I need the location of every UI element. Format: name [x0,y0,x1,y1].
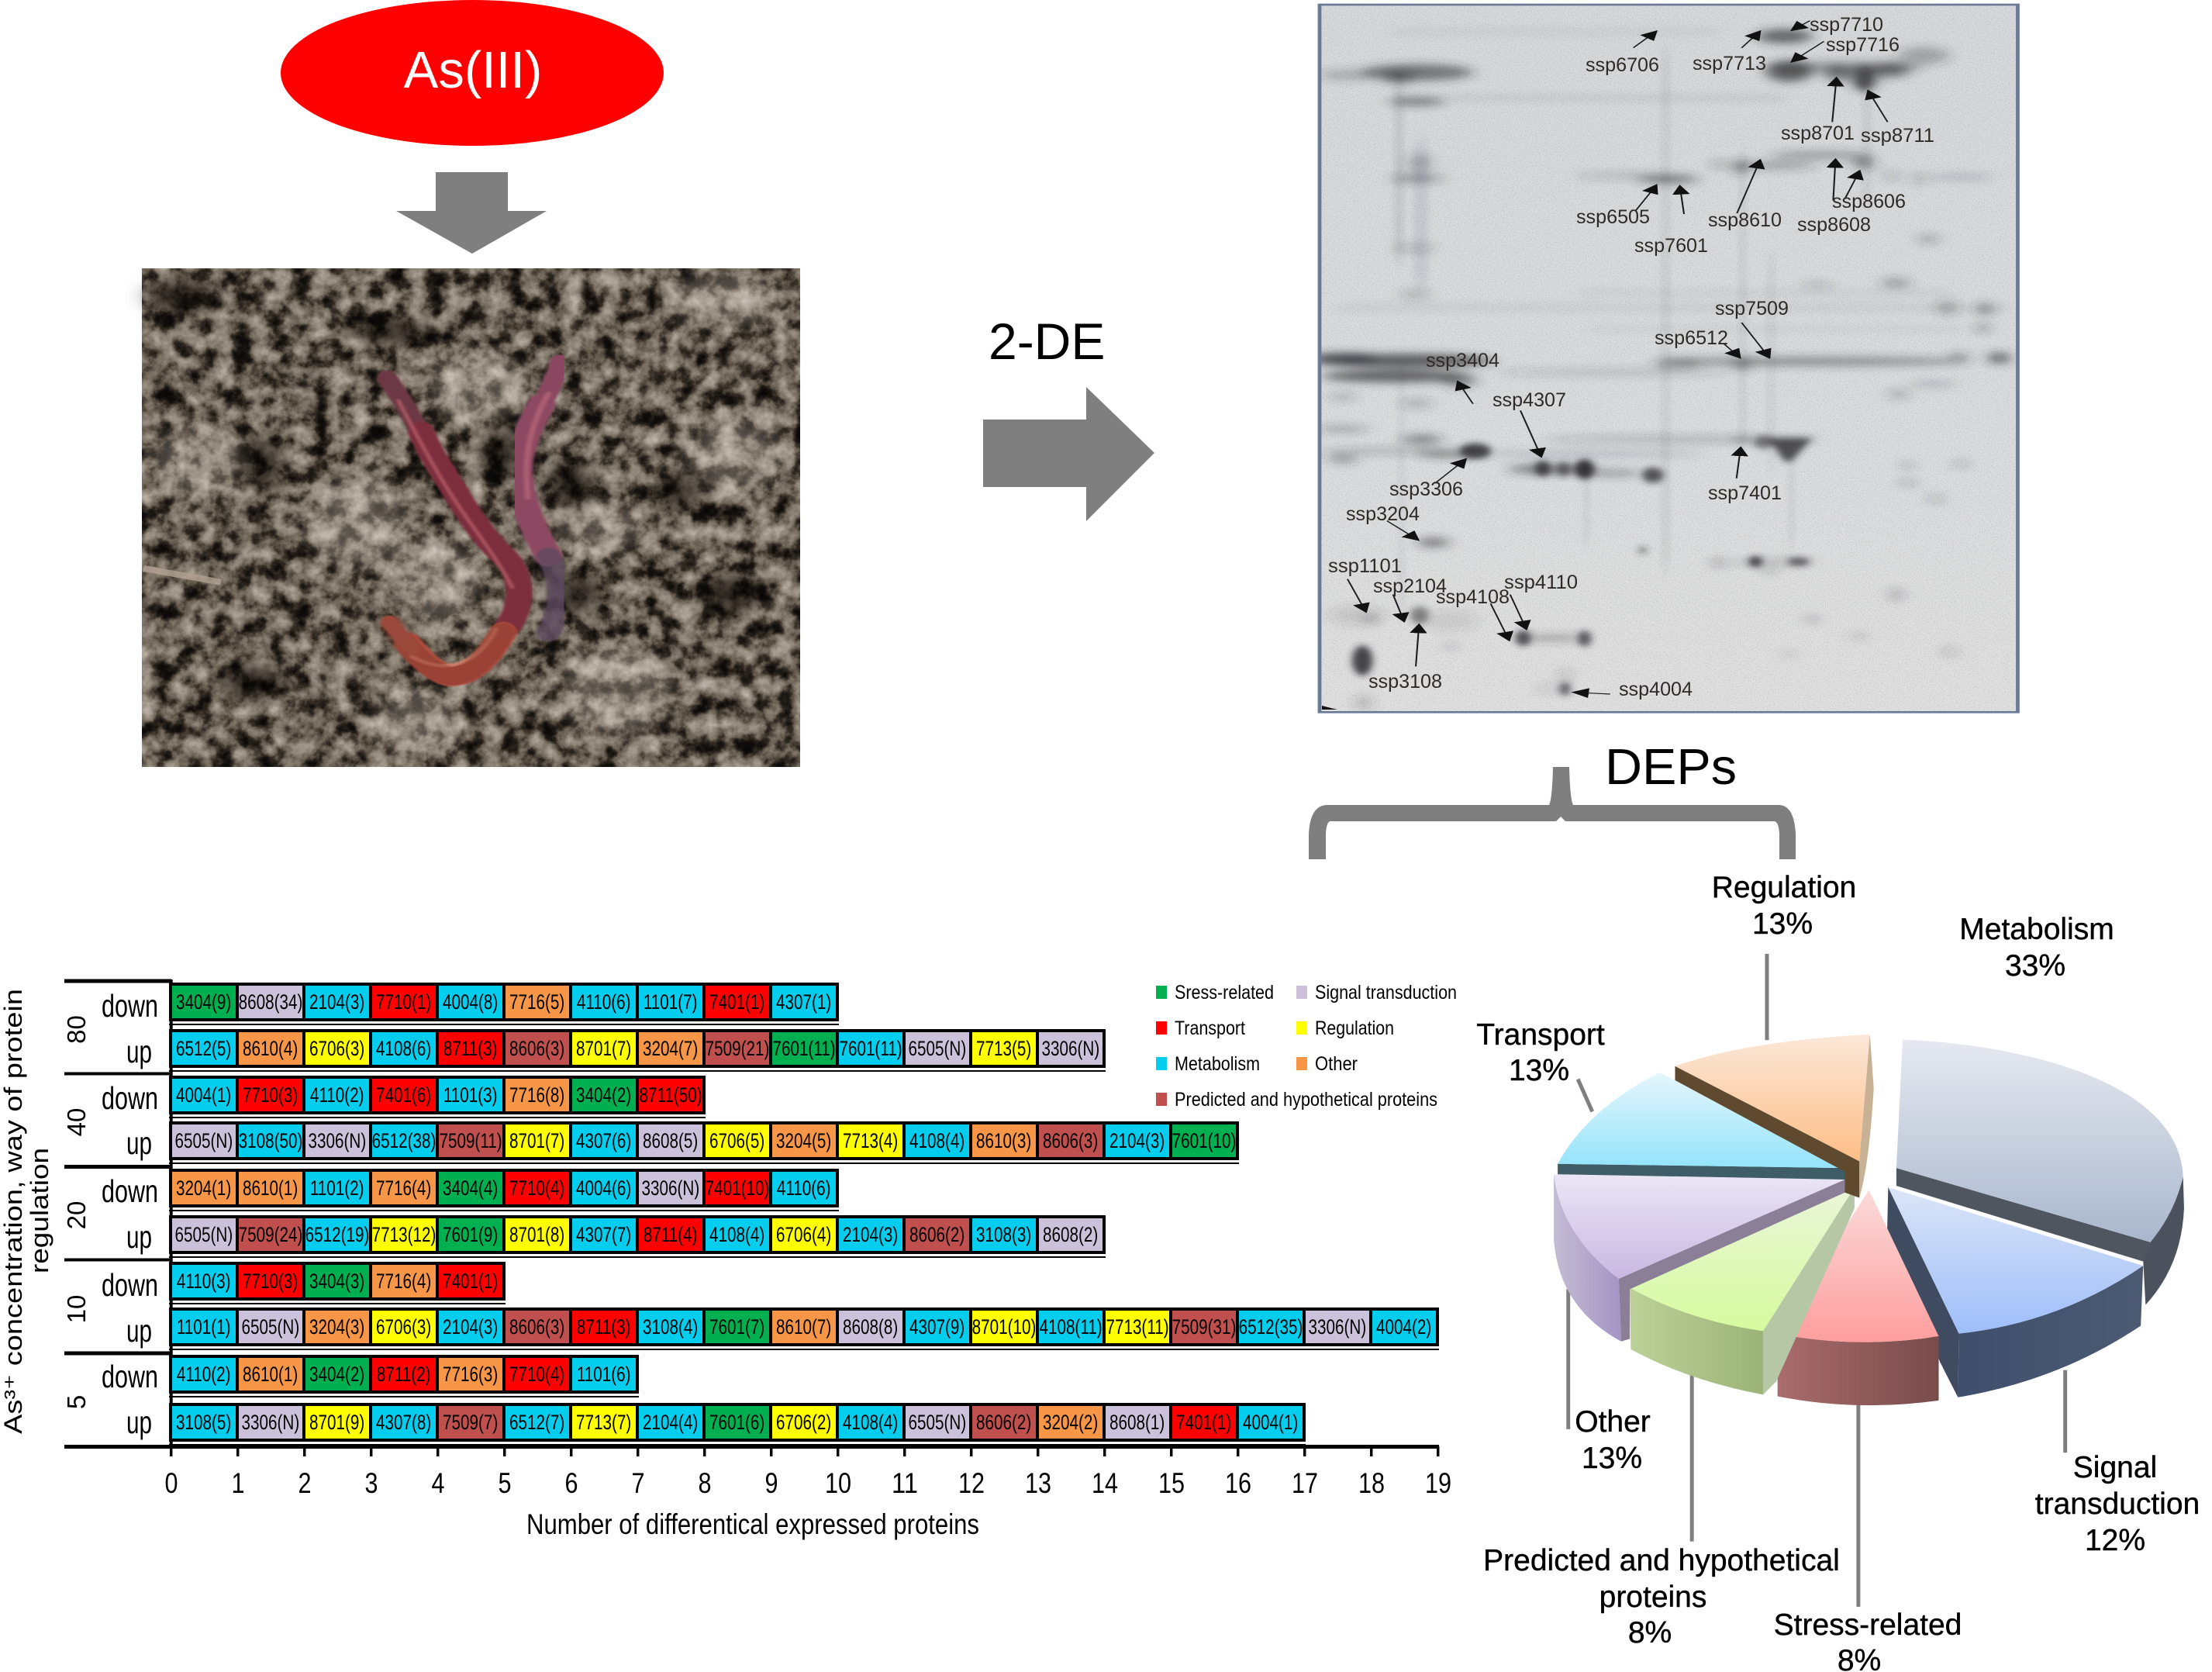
gel spot labels: ssp3204 [1346,503,1420,525]
bars: 10 up: 4004(2) [1376,1315,1432,1339]
bars: 20 down: 7401(10) [706,1176,769,1200]
bars: 10 up: 8711(3) [577,1315,631,1339]
legend: functional categories: Other [1315,1053,1358,1075]
bars: 20 up: 3108(3) [976,1223,1032,1246]
regulation direction labels [102,988,158,1440]
regulation direction labels: down [102,1267,158,1303]
bars: 80 up: 8606(3) [509,1037,565,1060]
bars: 80 down: 7710(1) [376,990,432,1014]
bars: 5 up: 3306(N) [242,1411,299,1434]
bars: 10 up: 3204(3) [309,1315,365,1339]
regulation direction labels: down [102,1359,158,1394]
bars: 10 down: 4110(3) [177,1270,231,1293]
legend: functional categories [1156,982,1457,1111]
bars: 20 up: 8701(8) [509,1223,565,1246]
bars: 80 up: 6505(N) [909,1037,966,1060]
slice: other [1554,1174,1845,1342]
y axis and group dividers [64,979,1439,1449]
bars: 40 up: 8606(3) [1043,1129,1099,1152]
bars: 20 down: 8610(1) [243,1176,298,1200]
legend: functional categories: Sress-related [1175,982,1274,1004]
bars: 80 down: 7716(5) [509,990,565,1014]
gel spot labels: ssp3108 [1368,671,1442,693]
bars: 10 down: 7716(4) [376,1270,432,1293]
bars: 10 up: 8608(8) [843,1315,899,1339]
bars: 10 up: 4108(11) [1039,1315,1103,1339]
regulation direction labels: up [126,1034,152,1069]
regulation direction labels: up [126,1404,152,1440]
bars: 80 up: 8711(3) [443,1037,498,1060]
bars: 80 up: 6512(5) [176,1037,232,1060]
arrow: As(III) down to soil photo [396,172,547,254]
bars: 10 up: 7713(11) [1106,1315,1169,1339]
bars: 40 down: 4004(1) [176,1083,232,1107]
bars: 20 up: 4108(4) [709,1223,765,1246]
bars: 20 up: 4307(7) [576,1223,632,1246]
bars: 40 down: 7710(3) [243,1083,298,1107]
x axis numbers: 11 [892,1467,918,1499]
bars: 40 up: 7509(11) [439,1129,502,1152]
x axis numbers: 12 [958,1467,985,1499]
bars: 10 down: 7710(3) [243,1270,298,1293]
bars: 10 down: 7401(1) [443,1270,499,1293]
gel spot labels: ssp2104 [1373,575,1447,597]
bars: 20 down [169,1169,839,1211]
bars: 5 up: 7401(1) [1176,1411,1232,1434]
bars: 20 up: 7509(24) [239,1223,302,1246]
bars: 40 down: 3404(2) [576,1083,632,1107]
bars: 5 down: 7710(4) [509,1363,565,1386]
bars: 5 down: 8610(1) [243,1363,298,1386]
bars: 40 up: 6512(38) [372,1129,436,1152]
bars: 80 down: 4004(8) [443,990,499,1014]
bars: 40 down: 4110(2) [310,1083,364,1107]
pie labels: Metabolism [1959,913,2114,946]
bars: 80 down: 3404(9) [176,990,232,1014]
bars: 40 down: 8711(50) [639,1083,702,1107]
pie labels: 13% [1752,907,1813,941]
bars: 20 down: 3306(N) [642,1176,699,1200]
bars: 5 down [169,1355,639,1397]
bars: 5 up: 4004(1) [1243,1411,1299,1434]
bars: 5 down: 7716(3) [443,1363,499,1386]
pie labels: 33% [2005,949,2065,983]
bars: 80 up: 7601(11) [839,1037,902,1060]
bars: 5 up: 3204(2) [1043,1411,1099,1434]
gel spot labels: ssp7509 [1715,298,1789,320]
bars: 80 up [169,1029,1106,1072]
gel spot labels: ssp8711 [1861,125,1934,147]
gel spot labels: ssp4108 [1436,586,1510,608]
x axis title: Number of differentical expressed proteins [526,1508,979,1540]
gel spot labels: ssp6512 [1655,327,1728,349]
x axis numbers: 18 [1358,1467,1385,1499]
slice: regulation [1675,1035,1874,1198]
heading: DEPs: DEPs [1605,738,1737,795]
bars: 20 down: 3404(4) [443,1176,499,1200]
concentration labels: 20 [62,1201,91,1229]
gel spot labels: ssp4110 [1504,572,1578,593]
bars: 40 up: 3108(50) [239,1129,302,1152]
bars: 10 up: 6706(3) [376,1315,432,1339]
bars: 20 down: 7716(4) [376,1176,432,1200]
bars: 20 up: 8606(2) [909,1223,965,1246]
x axis numbers: 3 [364,1467,378,1499]
bars: 10 up: 4307(9) [909,1315,965,1339]
bars: 10 up: 1101(1) [177,1315,231,1339]
slice: predicted and hypothetical proteins [1630,1187,1855,1394]
bars: 10 down [169,1262,506,1304]
pie labels: Predicted and hypothetical [1483,1544,1840,1577]
bars: 20 up: 7601(9) [443,1223,499,1246]
regulation direction labels: down [102,1080,158,1116]
bars: 40 up: 8701(7) [509,1129,565,1152]
regulation direction labels: down [102,988,158,1024]
slice: signal transduction [1887,1187,2143,1397]
concentration labels [62,1015,91,1409]
x axis numbers: 7 [631,1467,645,1499]
concentration labels: 5 [62,1395,91,1409]
x axis numbers: 10 [825,1467,851,1499]
pie labels: 12% [2085,1524,2145,1557]
bars: 5 down: 4110(2) [177,1363,231,1386]
bars: 40 down: 7401(6) [376,1083,432,1107]
x axis numbers: 1 [231,1467,245,1499]
bars: 80 down: 1101(7) [644,990,698,1014]
x axis numbers: 9 [764,1467,778,1499]
regulation direction labels: up [126,1219,152,1255]
bars: 80 up: 3204(7) [643,1037,699,1060]
x axis numbers: 13 [1025,1467,1051,1499]
gel spot labels: ssp7601 [1634,235,1708,257]
bars: 10 up: 2104(3) [443,1315,499,1339]
bars: 40 up: 4108(4) [909,1129,965,1152]
bars: 20 down: 4110(6) [777,1176,831,1200]
bars: 5 down: 8711(2) [377,1363,431,1386]
bars: 5 down: 3404(2) [309,1363,365,1386]
regulation direction labels: down [102,1173,158,1209]
x axis numbers: 6 [564,1467,578,1499]
bars: 80 up: 4108(6) [376,1037,432,1060]
worm 2 [519,362,560,633]
bars: 10 up: 8606(3) [509,1315,565,1339]
bars: 20 up: 6512(19) [305,1223,369,1246]
gel spot labels: ssp8701 [1781,123,1855,144]
gel spot labels: ssp8608 [1797,214,1871,236]
gel spot labels: ssp4004 [1619,679,1693,700]
x axis numbers: 17 [1292,1467,1318,1499]
label: 2-DE: 2-DE [989,313,1105,370]
legend: functional categories: Predicted and hypothetical proteins [1175,1089,1437,1111]
gel spot labels: ssp7401 [1708,482,1782,504]
y axis title [0,989,53,1434]
bars: 20 up [169,1215,1106,1258]
gel spot labels: ssp6706 [1586,54,1659,76]
bars: 5 up [169,1403,1306,1446]
bars: 40 up: 6505(N) [175,1129,233,1152]
gel spot labels: ssp7710 [1810,14,1883,36]
gel frame [1320,5,2017,712]
bars: 20 up: 6706(4) [776,1223,832,1246]
bars: 80 up: 8701(7) [576,1037,632,1060]
bars: 10 up: 6505(N) [242,1315,299,1339]
x axis numbers: 0 [164,1467,178,1499]
bars: 40 up: 2104(3) [1109,1129,1165,1152]
pie labels: 8% [1628,1616,1672,1650]
x axis numbers: 5 [498,1467,512,1499]
gel spot labels: ssp1101 [1328,555,1402,577]
legend: functional categories: Metabolism [1175,1053,1260,1075]
regulation direction labels: up [126,1125,152,1161]
pie labels: transduction [2035,1487,2200,1521]
bars: 80 down: 7401(1) [709,990,765,1014]
bars: 10 up: 7509(31) [1172,1315,1236,1339]
bars: 10 up: 6512(35) [1239,1315,1303,1339]
bars: 5 up: 8606(2) [976,1411,1032,1434]
x axis numbers: 2 [298,1467,312,1499]
slice: transport [1558,1073,1845,1180]
bars: 10 up: 7601(7) [709,1315,765,1339]
bars: 40 down: 1101(3) [443,1083,498,1107]
leader lines [1568,954,2065,1607]
bars: 20 up: 8711(4) [644,1223,698,1246]
bars: 20 down: 7710(4) [509,1176,565,1200]
x axis numbers: 15 [1158,1467,1185,1499]
pie chart: protein function categories [1554,954,2184,1607]
bars: 40 up: 8610(3) [976,1129,1032,1152]
bars: 5 up: 6512(7) [509,1411,565,1434]
worm 1 [387,378,519,675]
pie labels: 13% [1509,1054,1569,1087]
bars: 40 up: 7601(10) [1172,1129,1236,1152]
legend: functional categories: Transport [1175,1017,1245,1039]
gel spot labels: ssp8606 [1832,191,1906,212]
bars: 40 up: 8608(5) [643,1129,699,1152]
bars: 40 up: 4307(6) [576,1129,632,1152]
bars: 40 up: 6706(5) [709,1129,765,1152]
bars: 20 down: 4004(6) [576,1176,632,1200]
bars: 80 down: 4110(6) [577,990,631,1014]
bars: 5 up: 7713(7) [576,1411,632,1434]
bars: 10 up: 3306(N) [1309,1315,1366,1339]
bar chart axes and labels [0,979,1451,1540]
concentration labels: 10 [62,1295,91,1323]
legend: functional categories: Signal transduction [1315,982,1457,1004]
bars: 20 up: 8608(2) [1043,1223,1099,1246]
As(III) label ellipse [281,0,664,146]
bars: 10 up: 3108(4) [643,1315,699,1339]
bars: 5 up: 8701(9) [309,1411,365,1434]
x axis numbers [164,1467,1451,1499]
gel spot labels: ssp3306 [1389,478,1463,500]
bars: 5 down: 1101(6) [577,1363,631,1386]
gel spot labels: ssp8610 [1708,209,1782,231]
x axis numbers: 16 [1225,1467,1251,1499]
bars: 5 up: 6706(2) [776,1411,832,1434]
pie labels [1476,871,2200,1672]
concentration labels: 80 [62,1015,91,1044]
pie labels: Transport [1476,1018,1605,1052]
bars: 40 up: 3306(N) [309,1129,366,1152]
bars: 80 up: 7509(21) [706,1037,769,1060]
bars: 80 up: 3306(N) [1042,1037,1099,1060]
slice: stress-related [1778,1190,1938,1405]
bars: 5 up: 6505(N) [909,1411,966,1434]
bars: 20 down: 3204(1) [176,1176,232,1200]
bars: 40 down [169,1076,706,1118]
bars: 40 down: 7716(8) [509,1083,565,1107]
bars: 80 up: 7713(5) [976,1037,1032,1060]
spot arrows [1348,21,1888,694]
bars: 20 up: 2104(3) [843,1223,899,1246]
bars: 40 up: 7713(4) [843,1129,899,1152]
pie labels: Signal [2073,1451,2157,1484]
bars: 20 up: 7713(12) [372,1223,436,1246]
bars: 5 up: 8608(1) [1109,1411,1165,1434]
arrow: photo to gel [983,387,1154,521]
bars: 80 down: 4307(1) [776,990,832,1014]
panel: 2-DE gel image [1308,5,2017,712]
gel spot labels: ssp7716 [1826,34,1900,56]
bars: 80 down: 8608(34) [239,990,302,1014]
photo: earthworms on soil [142,268,800,767]
bars: 5 up: 2104(4) [643,1411,699,1434]
bars: 80 down [169,983,839,1025]
x axis ticks [171,1446,1438,1456]
pie labels: Stress-related [1774,1608,1962,1642]
bars: 5 up: 7509(7) [443,1411,499,1434]
bars: 80 down: 2104(3) [309,990,365,1014]
pie labels: Other [1575,1405,1651,1439]
y axis title: As³⁺ concentration, way of protein [0,989,27,1434]
bars: 20 down: 1101(2) [310,1176,364,1200]
bars: 10 up [169,1308,1439,1350]
regulation direction labels: up [126,1313,152,1349]
bars: 10 down: 3404(3) [309,1270,365,1293]
gel spot labels: ssp7713 [1693,53,1766,74]
As(III) label ellipse: As(III) [404,41,542,99]
brace: DEPs grouping [1309,767,1796,859]
bars: 80 up: 7601(11) [772,1037,836,1060]
y axis title: regulation [26,1148,53,1273]
bars: 40 up [169,1121,1239,1164]
gel spot labels [1328,14,1934,700]
bars: 10 up: 8701(10) [972,1315,1036,1339]
bars: 5 up: 4307(8) [376,1411,432,1434]
x axis numbers: 4 [431,1467,445,1499]
bars: 40 up: 3204(5) [776,1129,832,1152]
gel spot labels: ssp6505 [1576,206,1650,228]
bars: 5 up: 3108(5) [176,1411,232,1434]
slice: metabolism [1896,1039,2184,1305]
bars: 5 up: 7601(6) [709,1411,765,1434]
gel spot labels: ssp4307 [1492,389,1566,411]
x axis numbers: 8 [698,1467,712,1499]
x axis numbers: 14 [1092,1467,1118,1499]
gel background and spots [1308,5,2017,712]
pie labels: proteins [1599,1580,1706,1614]
legend: functional categories: Regulation [1315,1017,1394,1039]
bars: 80 up: 6706(3) [309,1037,365,1060]
bars: 5 up: 4108(4) [843,1411,899,1434]
gel spot labels: ssp3404 [1426,350,1499,371]
pie labels: 13% [1582,1442,1642,1475]
bars: 10 up: 8610(7) [776,1315,832,1339]
bars: 20 up: 6505(N) [175,1223,233,1246]
pie labels: Regulation [1712,871,1856,904]
bars: 80 up: 8610(4) [243,1037,298,1060]
x axis numbers: 19 [1425,1467,1451,1499]
concentration labels: 40 [62,1108,91,1136]
